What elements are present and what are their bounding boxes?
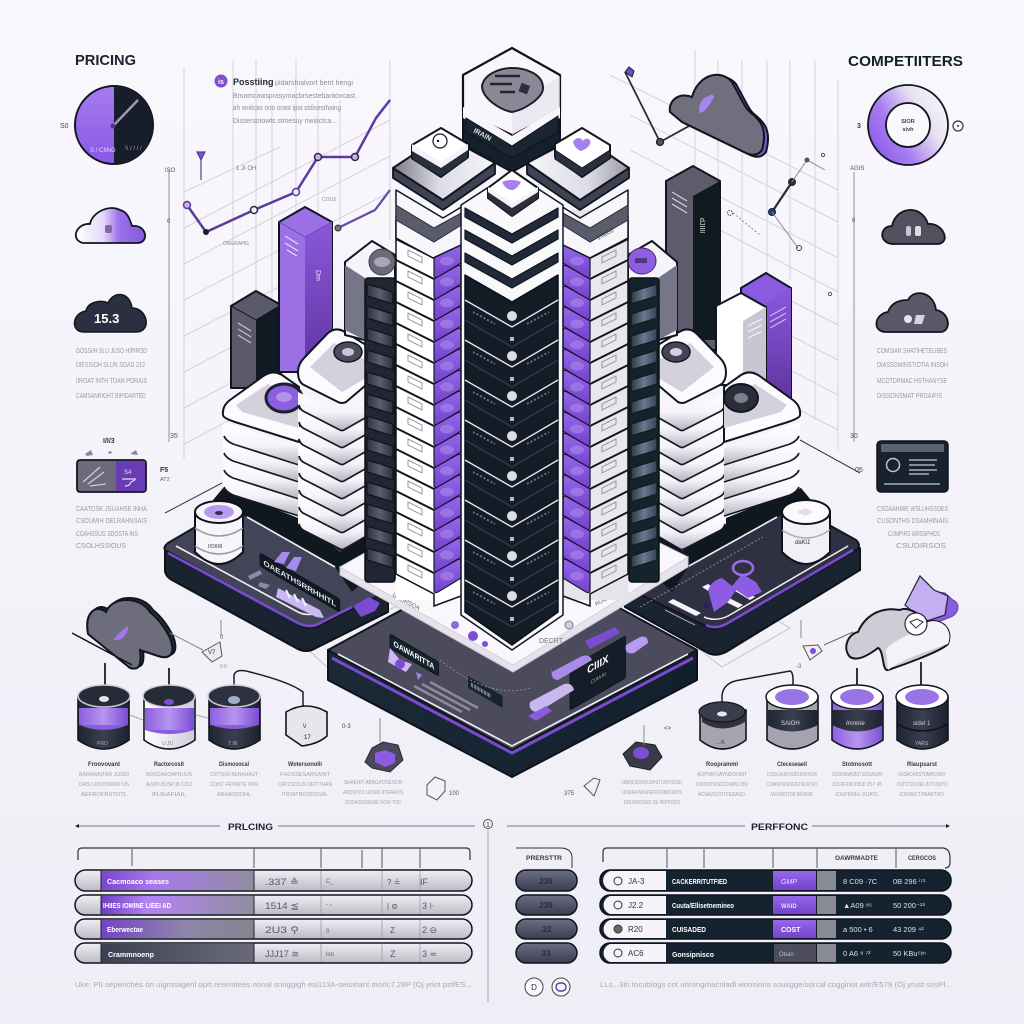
stack: outer right [724, 372, 800, 516]
left text block: upper: CAMSANRIGHT BIPIOARTED [76, 393, 146, 400]
performance row 1 [600, 870, 951, 891]
performance row 2: 50 200⁻¹³ [893, 901, 925, 910]
performance row 2: WAID [781, 904, 797, 910]
note: center left: ADDSITOI 1DOAS IITRAHOS [343, 790, 403, 796]
top server module: IRAIN [472, 128, 492, 143]
right text block: upper [877, 348, 948, 400]
cylinder captions: right two [767, 761, 818, 798]
pricing row 2: 3 ⊦ [422, 901, 434, 911]
performance row 1: CACKERRITUTFIED [672, 877, 727, 886]
platform: center: IIIIIIIIIIIIII [471, 682, 491, 700]
donut chart: competitors: sivh [902, 127, 914, 133]
pricing row 2: 1514 ≦ [265, 901, 299, 911]
positioning text block: pldarshialvort bent hengi [275, 78, 353, 87]
cylinder captions: right three: OSODIAWEBSTSIDSAIOIN [832, 772, 882, 778]
base plate [340, 470, 688, 672]
pricing row 4: lon [326, 952, 334, 958]
platform: center: CUIA III [591, 671, 606, 686]
note: center right: HNRESOOSCAPIOTZATIOSEI [622, 780, 682, 786]
cylinder captions: right four: SASAORIISTDMROOM7 [898, 772, 946, 778]
icon: left tag: 0 [220, 635, 224, 641]
pricing row 3: 2 ⊖ [422, 925, 437, 935]
preset pills column [516, 848, 577, 963]
bar: dark right [666, 166, 720, 350]
performance row 4: Oban [779, 952, 794, 958]
cylinder captions: left four: PRYATROOOSSAL [282, 792, 328, 798]
left axis labels: ONGRAHG [223, 241, 249, 247]
performance row 4: Gonsipnisco [672, 950, 714, 959]
preset pills column: 239 [539, 901, 553, 910]
cylinder captions: right three: JOUPEKIHL RIJATIL [835, 792, 879, 798]
left text block: lower: CSOLHSSIOUS [76, 543, 126, 550]
cylinder captions: left one: Froovovant [88, 761, 121, 768]
right text block: upper: COMSIAR SHATIHETELIBES [877, 348, 947, 355]
cylinder: left three: T IN [228, 741, 238, 747]
table heading: pricing [75, 822, 475, 833]
cylinder: small dark right [699, 702, 746, 749]
base plate: AOORSS [594, 590, 620, 608]
left axis labels: ISO [165, 168, 176, 174]
right chart lines [625, 67, 832, 296]
icon: left grey cloud with check [72, 598, 175, 669]
cylinder captions: left two: Ractorcosit [154, 761, 185, 768]
cylinder captions: right two: CSOUIAIFOSIDUDRSOR [767, 772, 817, 778]
pricing row 2 [75, 895, 472, 915]
icon: small tag boxes [427, 777, 600, 800]
pricing row 4: JJJ17 ≅ [265, 949, 299, 959]
center divider with info icon [484, 820, 492, 1002]
icon: dark cloud with value [74, 294, 146, 332]
pricing gauge: \\ / / / / [125, 146, 142, 152]
pricing row 4: Crammnoenp [108, 950, 154, 959]
right isometric grid [610, 50, 860, 473]
note: center right: DOUMOSSED SE PEPPOOS [624, 800, 680, 806]
pricing row 1: C_ [326, 879, 334, 885]
left text block: lower: CAATOSK JSUAHSE INHA [76, 506, 147, 513]
cylinder: left one [78, 685, 130, 749]
right axis labels [170, 166, 864, 474]
pricing row 1: Cacmoaco seases [107, 877, 169, 886]
cylinder: small white left: \/ [303, 724, 307, 730]
platform: center: OAWARITTA [393, 639, 435, 672]
right axis labels: 05 [855, 467, 863, 474]
positioning text block: is [218, 79, 224, 86]
cylinder: left one: PRO [97, 741, 108, 747]
cylinder: right three [831, 685, 883, 749]
right text block: lower: CSUDIRSOS [896, 543, 946, 550]
round buttons: D [531, 983, 537, 992]
performance row 2 [600, 895, 951, 915]
cylinder connectors [105, 662, 921, 720]
right text block: lower [877, 506, 948, 550]
bar: dark left [231, 291, 281, 388]
note: center left: SHAERIT ABNGPOSESOR [344, 780, 402, 786]
left isometric grid [165, 58, 390, 513]
right text block: upper: DIASSOMINSTIOTIA INSOH [877, 362, 948, 369]
pricing row 4 [75, 943, 472, 963]
cylinder captions: left one: OAIS CONTDMORI IUS [79, 782, 129, 788]
left mini panel: S4 [124, 470, 132, 476]
note: center right: UDIERA WASOEFOFOBRCINITS [622, 790, 682, 796]
cylinder: small dark right: .. A [716, 740, 725, 746]
pricing row 3: 2U3 ⚲ [265, 925, 299, 935]
pricing row 2: IHIIES IOMINE LIEEI AD [103, 901, 171, 910]
donut chart: competitors [857, 85, 963, 165]
top server module [463, 48, 560, 172]
right text block: upper: DISSONSMAT PRDAIFIS [877, 393, 942, 400]
positioning text block: Bmamcawsprasymacbrsestebantoxcast. [233, 91, 357, 100]
pricing row 1: .337 ≙ [265, 877, 299, 887]
preset pills column: 239 [539, 877, 553, 886]
performance row 3: a 500 • 6 [843, 925, 873, 934]
pricing row 3: Z [390, 926, 395, 935]
cylinder captions: right three: Stotmosott [842, 761, 873, 768]
table heading: pricing: PRLCING [228, 822, 273, 833]
platform: left [164, 488, 400, 667]
cylinder: right four: sidel 1 [913, 721, 931, 727]
pricing row 2: - - [326, 902, 332, 908]
center divider with info icon: 1 [486, 822, 490, 829]
cylinder captions: right four: DO7Z10.DEI.8I713I070 [897, 782, 947, 788]
pricing row 1 [75, 870, 472, 891]
tower: center [461, 170, 563, 650]
icon: left tag [170, 620, 227, 670]
icon: right white and purple cloud [824, 576, 958, 670]
left mini panel: F5 [160, 467, 168, 474]
icon: left purple node [342, 718, 403, 772]
pricing gauge [60, 86, 153, 164]
note: center left [343, 780, 403, 806]
cylinder: small white left: 17 [304, 735, 311, 741]
left text block: lower [76, 506, 147, 550]
performance row 2: Cuuta/Ellisetnemineo [672, 901, 734, 910]
bar: purple left [279, 207, 332, 372]
positioning text block: ah wnitcas ono orast ipst stdisesthaing [233, 103, 341, 112]
performance row 2: ▲A09 ⁸⁵ [843, 901, 872, 910]
pricing gauge: S / CIING [90, 148, 116, 154]
cylinder: right two: SAIOH [781, 721, 800, 727]
cylinder captions: left four: Wotersonolli [288, 761, 322, 768]
cylinder: left two: U JU [162, 741, 174, 747]
right axis labels: 35 [170, 433, 178, 440]
bar: purple right [741, 273, 791, 400]
right axis labels: 30 [850, 433, 858, 440]
donut chart: competitors: 3 [857, 123, 861, 130]
icon: left tag: V7 [208, 650, 216, 656]
pricing table [75, 848, 472, 963]
cylinder: small white left [286, 706, 327, 746]
cylinder captions: right one: ACNA2SOOTFEDASO. [698, 792, 746, 798]
cylinder captions: right three: JDOIF2I8.0953I 2S7 45 [832, 782, 882, 788]
right text block: lower: CSOAAHMIE WSLUHSSOES [877, 506, 948, 513]
icon: small tag boxes: 100 [449, 791, 460, 797]
performance row 1: 8 C09 ·7C [843, 877, 878, 886]
heading: competitors: COMPETIITERS [848, 53, 963, 70]
cylinder captions: left three [210, 761, 259, 798]
icon: right tag [796, 620, 822, 670]
icon: right tag: -3 [796, 664, 802, 670]
performance footnote: LLs...3in tocuttiogs cot unrongmacnladl wonsions sousgge/sorcal cogginot witr/E579 (Oj yrust sosPl... [600, 980, 952, 989]
cylinder captions: right two: COMNITRSIDEISTIELR NO [767, 782, 818, 788]
positioning text block [214, 74, 357, 125]
left text block: upper [76, 348, 147, 400]
icon: right purple node [623, 725, 672, 770]
cylinder captions: right one: IODOOTRSD22340B1.050 [696, 782, 748, 788]
left mini panel: AT2 [160, 477, 170, 483]
left axis labels: 0 [167, 219, 171, 225]
cylinder captions: right one [696, 761, 748, 798]
right axis labels: 8 [852, 218, 856, 224]
positioning text block: Dissersotowts.stmesuy nwiactca... [233, 116, 337, 125]
icon: competitor cloud one [882, 210, 945, 244]
right mini panel [877, 441, 948, 492]
cylinder: left three [208, 685, 260, 749]
small drum on right platform [782, 500, 830, 564]
right text block: upper: MCOTDRMAC HSTHANYSE [877, 378, 947, 385]
pricing row 1: IF [420, 877, 429, 887]
cylinder captions: left four: CATCSDCIS DETITHAN [278, 782, 332, 788]
cylinder captions: left three: CRTSHS BERAHAUT [210, 772, 259, 778]
cylinder: right three: Imrerie [846, 721, 865, 727]
cylinder captions: left three: COIST FRTANTE ITAN [210, 782, 258, 788]
bar: purple left: Dm [314, 270, 321, 281]
performance row 4: AC6 [628, 949, 644, 958]
cylinder captions: right two: JASONSTDE BRIOSK. [770, 792, 814, 798]
left text block: upper: IIROAT INTH TDAN PORAIS [76, 378, 147, 385]
preset pills column: .22 [540, 925, 552, 934]
performance row 1: 0B 296 ⁱ⁷¹ [893, 877, 926, 886]
cylinder: left two [143, 685, 195, 749]
left mini panel [77, 460, 170, 492]
performance row 4 [600, 943, 951, 963]
left text block: upper: DIESSIOH SLUN SOAD 212 [76, 362, 145, 369]
cylinder captions: right one: Roopramml [706, 761, 738, 768]
stack: inner left [298, 329, 366, 550]
cylinder captions: right three [832, 761, 882, 798]
dark side column: right [629, 278, 659, 582]
left text block: upper: GOSSIIH SLU JUSO HIPIROD [76, 348, 147, 355]
cylinder captions: right two: Cteceseaell [777, 761, 807, 768]
cylinder captions: right four [897, 761, 947, 798]
cylinder: right four [896, 685, 948, 749]
platform: left: OAEATHSRRHHITL [263, 558, 337, 609]
cylinder captions: right four: Rlaupsarst [907, 761, 938, 768]
pricing footnote: Uke: PII sepenches ori uigmsagenl oprt resentiees nonal snnggigh esi113A-seisxtant morlc7.28P (Oj yriot pzifES... [75, 980, 472, 989]
icon: left tag: 0 0 [220, 664, 227, 670]
pricing row 4: 3 ≂ [422, 949, 437, 959]
dark side column: left [365, 278, 395, 582]
back cap: left [345, 241, 395, 340]
positioning text block: Posstiing [233, 77, 274, 87]
icon: small tag boxes: 375 [564, 791, 575, 797]
line chart: pricing trend [184, 100, 390, 235]
pricing row 3 [75, 919, 472, 939]
performance row 3: CUISADED [672, 925, 707, 934]
bar: white right [716, 293, 766, 385]
cylinder captions: right four: JOKMIICT.PAARTRO. [899, 792, 945, 798]
icon: right purple node: <> [664, 726, 672, 732]
performance row 3: R20 [628, 925, 643, 934]
preset pills column: PRERSTTR [526, 855, 562, 862]
cylinder captions: left three: Dismosocal [219, 761, 249, 768]
right text block: lower: CUSONTHS DSAMHINAIS [877, 518, 948, 525]
cylinder captions: left one: AEFROFRSTOTL [81, 792, 127, 798]
back cap: right [628, 241, 677, 340]
performance table [600, 848, 951, 963]
stack: outer left [223, 372, 302, 516]
tower: right [527, 128, 629, 606]
icon: grey isometric cloud with swoosh [670, 75, 768, 157]
stack: inner right [658, 329, 726, 550]
pricing row 4: Z [390, 949, 396, 959]
platform: center [328, 550, 697, 777]
cylinder captions: right one: AOPNIFOAYNDOOMT [697, 772, 748, 778]
base plate: UDORSOA [391, 592, 421, 612]
performance table: CERGCOS [908, 855, 937, 862]
performance row 3 [600, 919, 951, 939]
round buttons [525, 978, 570, 996]
left axis labels: COUS [322, 197, 337, 203]
tower: right: 1.0000 [596, 228, 616, 242]
performance row 4: 50 KBu⁵ʸⁿ [893, 949, 926, 958]
performance row 1: JA-3 [628, 877, 645, 886]
performance row 2: J2.2 [628, 901, 644, 910]
icon: left purple node: 0-3 [342, 724, 351, 730]
table heading: performance [507, 822, 950, 833]
pricing value label: I/I/3 [103, 438, 115, 445]
cylinder: right four: YARS [915, 741, 929, 747]
left axis labels [165, 166, 337, 247]
platform: right [625, 488, 860, 667]
small drum on left platform [195, 501, 243, 564]
cylinder captions: left two: NOSCAHOAPRUUS [146, 772, 192, 778]
right text block: lower: CUMPIRS IARSSPHOS [888, 531, 940, 538]
pricing row 3: 0 [326, 929, 330, 935]
pricing row 2: | ⊜ [387, 902, 398, 911]
small drum on right platform: daKi1 [795, 540, 810, 546]
donut chart: competitors: SIOR [901, 119, 915, 125]
performance table: OAWRMADTE [835, 855, 879, 862]
pricing row 3: Eberwectae [107, 925, 143, 934]
small drum on left platform: IIOIIRI [208, 544, 222, 550]
icon: dark cloud with value: 15.3 [94, 311, 119, 326]
base plate: DECRT [539, 638, 564, 645]
left axis labels: 1 JI OH [236, 166, 256, 172]
icon: white and purple cloud [76, 208, 145, 243]
performance row 4: 0 A6 ⁸ ⁷² [843, 949, 871, 958]
note: center left: DODASESSENIE NOW TOC [345, 800, 401, 806]
preset pills column: 33 [542, 949, 551, 958]
cylinder captions: left four [278, 761, 332, 798]
icon: competitor cloud two [876, 293, 948, 332]
pricing row 1: ? ≟ [387, 878, 400, 887]
cylinder captions: left one: BARARAITAR JUSID [79, 772, 129, 778]
heading: pricing: PRICING [75, 52, 136, 69]
cylinder captions: left two: INJEAFIAIL [152, 792, 186, 798]
performance row 3: COST [781, 927, 801, 934]
cylinder captions: left four: FHOSSESARSAINT [280, 772, 331, 778]
table heading: performance: PERFFONC [751, 822, 808, 833]
right axis labels: AGIS [850, 166, 864, 172]
pricing gauge: S0 [60, 123, 69, 130]
tower: left [393, 128, 495, 606]
cylinder: right two [766, 685, 818, 749]
cylinder captions: left two [146, 761, 192, 798]
performance row 1: GMP [781, 879, 797, 886]
left text block: lower: CSOUMIH DELRAHNSAIS [76, 518, 147, 525]
platform: center: CIIIX [587, 652, 609, 677]
left text block: lower: COAHSSUG SDOSTA INS [76, 531, 138, 538]
note: center right [622, 780, 682, 806]
pricing value label [85, 438, 138, 456]
performance row 3: 43 209 ⁴² [893, 925, 924, 934]
cylinder captions: left one [79, 761, 129, 798]
cylinder captions: left two: AJUPLBUSP IB 1312 [146, 782, 192, 788]
cylinder captions: left three: ARHASDOHL [217, 792, 251, 798]
bar: dark right: dJIIII [698, 218, 705, 233]
